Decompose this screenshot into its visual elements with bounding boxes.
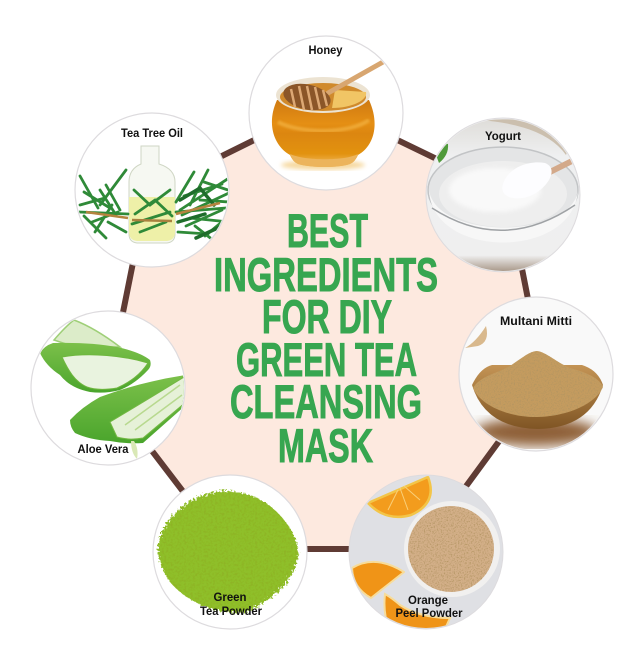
circle: orange peel powder: Orange [408, 593, 448, 607]
circle: green tea powder: Tea Powder [200, 604, 262, 618]
circle: orange peel powder [349, 475, 503, 640]
title: BEST [287, 204, 368, 257]
circle: tea tree oil [75, 113, 229, 267]
circle: honey: Honey [308, 43, 343, 57]
circle: tea tree oil: Tea Tree Oil [121, 126, 183, 140]
title: INGREDIENTS [214, 248, 438, 301]
circle: multani mitti [459, 297, 613, 451]
central heptagon panel [107, 105, 544, 549]
title: CLEANSING [230, 375, 422, 428]
circle: green tea powder [153, 475, 307, 629]
circle: orange peel powder: Peel Powder [396, 606, 463, 620]
circle: yogurt: Yogurt [485, 129, 521, 143]
title: FOR DIY [262, 290, 392, 343]
circle: aloe vera [31, 311, 186, 465]
title [214, 204, 438, 472]
circle: multani mitti: Multani Mitti [500, 314, 572, 328]
title: MASK [278, 419, 373, 472]
circle: yogurt [426, 118, 580, 274]
circle: green tea powder: Green [214, 590, 246, 604]
circle: honey [249, 36, 403, 190]
circle: aloe vera: Aloe Vera [78, 442, 129, 456]
title: GREEN TEA [236, 333, 417, 386]
